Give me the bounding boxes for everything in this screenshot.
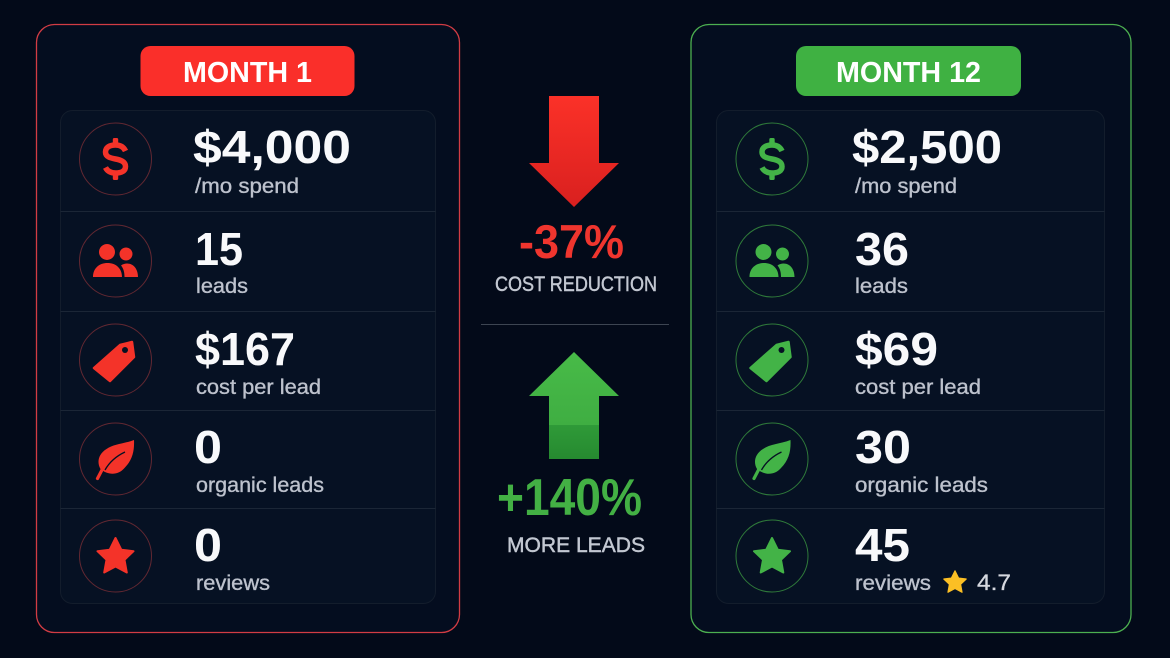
metric: leads (736, 223, 909, 298)
metric: cost per lead: cost per lead (855, 376, 981, 399)
metric: leads: 36 (855, 223, 909, 275)
metric: organic leads: 0 (194, 421, 222, 473)
metric: organic leads (80, 421, 324, 497)
metric: cost per lead: $69 (855, 323, 938, 375)
metric: organic leads (736, 421, 988, 497)
metric: spend: $2,500 (852, 121, 1002, 173)
badge: month 12 (796, 46, 1021, 96)
metric: reviews: reviews (196, 572, 270, 595)
metric: reviews: 45 (855, 519, 910, 571)
metric: reviews (80, 519, 270, 595)
metric: organic leads: 30 (855, 421, 911, 473)
metrics card: month 12 (716, 110, 1104, 604)
label: more leads: MORE LEADS (507, 534, 645, 557)
panel: month 12 (691, 24, 1131, 632)
metric: spend: /mo spend (855, 175, 957, 198)
stat: leads change: +140% (497, 469, 642, 527)
metric: leads (80, 223, 248, 298)
metric: organic leads: organic leads (196, 474, 324, 497)
badge: month 12: MONTH 12 (836, 57, 981, 89)
metric: spend (80, 121, 351, 198)
badge: month 1: MONTH 1 (183, 57, 312, 89)
rating value: 4.7 (977, 570, 1011, 595)
metric: leads: leads (196, 275, 248, 298)
metric: reviews (736, 519, 1011, 595)
metric: cost per lead (80, 323, 321, 399)
badge: month 1 (140, 46, 354, 96)
metrics card: month 1 (60, 110, 436, 604)
metric: spend: /mo spend (195, 175, 299, 198)
label: cost reduction: COST REDUCTION (495, 273, 657, 296)
metric: reviews: 0 (194, 519, 222, 571)
arrow: leads up (529, 352, 619, 459)
panel: month 1 (36, 24, 460, 632)
metric: reviews: reviews (855, 572, 931, 595)
metric: organic leads: organic leads (855, 474, 988, 497)
metric: spend: $4,000 (193, 121, 351, 173)
metric: cost per lead: cost per lead (196, 376, 321, 399)
panel: change summary (481, 96, 669, 557)
icon: rating star (944, 571, 966, 592)
metric: cost per lead (736, 323, 981, 399)
metric: spend (736, 121, 1002, 198)
metric: leads: 15 (195, 223, 243, 275)
arrow: cost down (529, 96, 619, 207)
metric: cost per lead: $167 (195, 323, 295, 375)
metric: leads: leads (855, 275, 908, 298)
stat: cost change: -37% (519, 215, 624, 268)
